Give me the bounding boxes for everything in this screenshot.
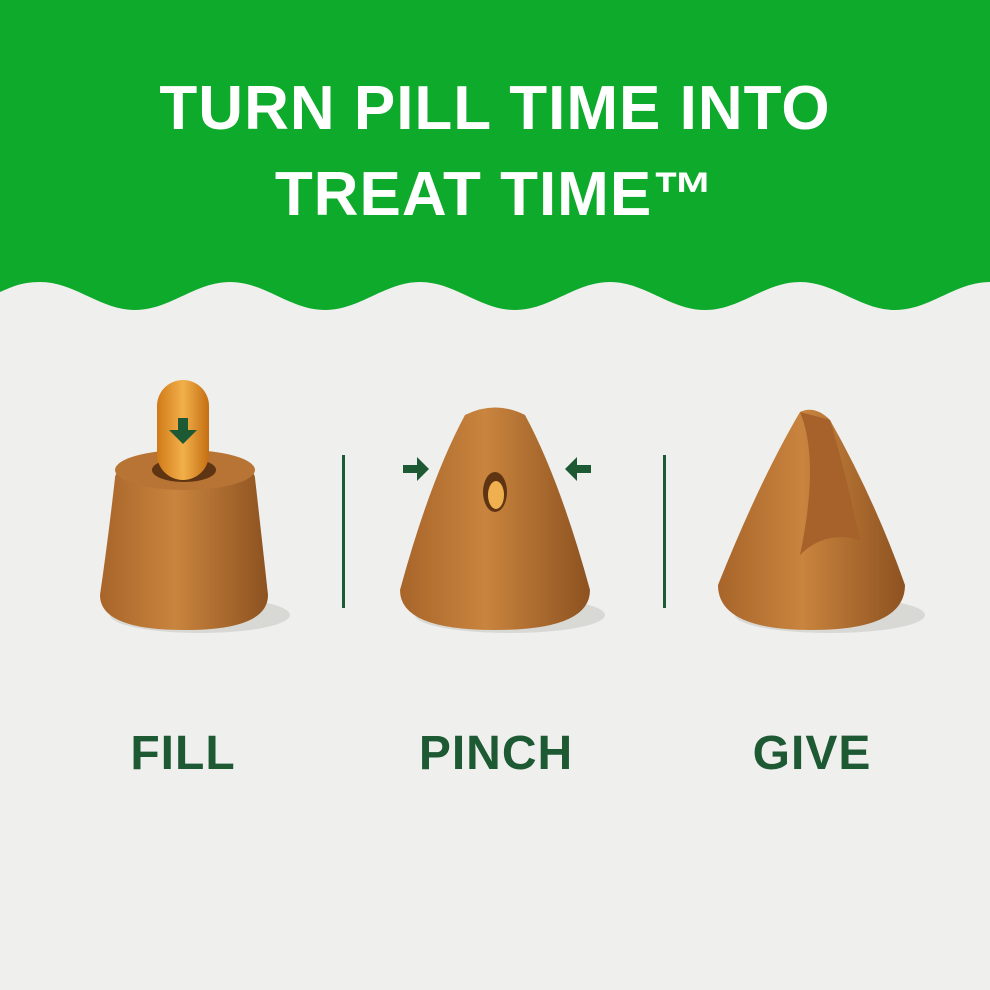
- treat: pinch: [400, 408, 605, 633]
- treat: fill: [100, 380, 290, 633]
- divider: [342, 455, 345, 608]
- label: fill: FILL: [130, 727, 236, 780]
- title: TREAT TIME™: [275, 160, 715, 229]
- treat: give: [718, 410, 925, 633]
- label: give: GIVE: [753, 727, 871, 780]
- label: pinch: PINCH: [419, 727, 573, 780]
- header band: [0, 0, 990, 310]
- icon: arrow down: [169, 418, 197, 444]
- icon: arrows in: [403, 457, 591, 481]
- divider: [663, 455, 666, 608]
- title: TURN PILL TIME INTO: [159, 74, 831, 143]
- title: [159, 74, 831, 229]
